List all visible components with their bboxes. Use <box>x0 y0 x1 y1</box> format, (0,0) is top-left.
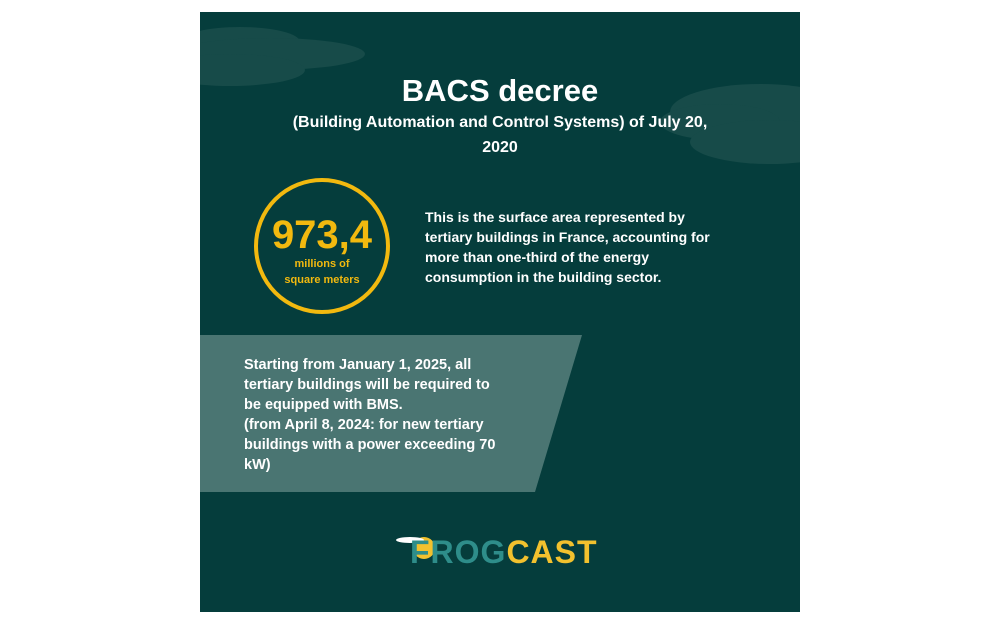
description text: tertiary buildings in France, accounting for <box>425 229 710 245</box>
logo text: FROGCAST <box>410 534 598 570</box>
requirement text: kW) <box>244 457 271 473</box>
panel: main background <box>200 12 800 612</box>
requirement text: Starting from January 1, 2025, all <box>244 357 471 373</box>
description text: consumption in the building sector. <box>425 269 661 285</box>
subtitle: (Building Automation and Control Systems) of July 20, <box>293 114 707 131</box>
description text: more than one-third of the energy <box>425 249 649 265</box>
title: BACS decree <box>402 73 598 108</box>
stat unit: square meters <box>284 274 360 286</box>
requirement text: (from April 8, 2024: for new tertiary <box>244 417 484 433</box>
description text: This is the surface area represented by <box>425 209 685 225</box>
band: requirement <box>200 335 582 492</box>
requirement text: be equipped with BMS. <box>244 397 403 413</box>
stat circle <box>254 178 390 314</box>
clouds decoration <box>200 27 800 164</box>
stat unit: millions of <box>294 258 350 270</box>
stat number: 973,4 <box>272 213 372 257</box>
requirement text <box>244 357 495 473</box>
subtitle <box>293 114 707 156</box>
logo: FROGCAST <box>396 534 598 570</box>
requirement text: tertiary buildings will be required to <box>244 377 490 393</box>
stat unit <box>284 258 360 286</box>
subtitle: 2020 <box>482 139 518 156</box>
requirement text: buildings with a power exceeding 70 <box>244 437 495 453</box>
icon: sun cloud <box>396 537 433 559</box>
description text <box>425 209 710 285</box>
